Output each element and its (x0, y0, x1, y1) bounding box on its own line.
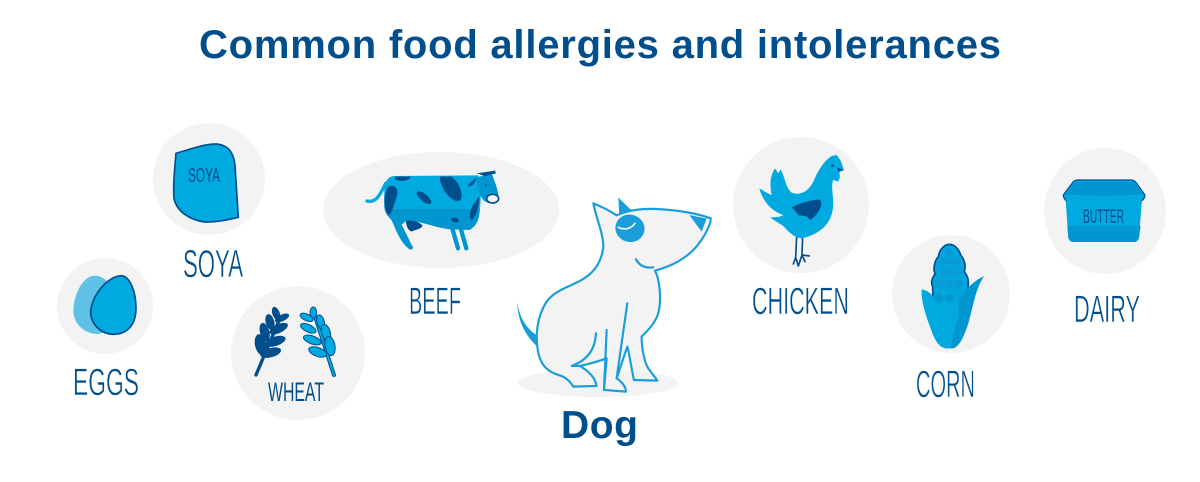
panel: corn (892, 235, 1010, 353)
icon: corn (922, 244, 984, 349)
panel: dairy (1044, 148, 1166, 274)
panel: wheat (231, 286, 365, 420)
label: dairy: DAIRY (1074, 289, 1140, 331)
icon: soya packet (174, 144, 238, 222)
label: corn: CORN (916, 364, 975, 406)
label: dog: Dog (561, 404, 638, 447)
icon: dog (517, 197, 711, 392)
panel: soya (153, 123, 265, 235)
label: chicken: CHICKEN (752, 281, 849, 323)
icon: cow (367, 171, 499, 248)
panel: chicken (733, 137, 869, 273)
label: soya: SOYA (183, 243, 243, 286)
label: eggs: EGGS (73, 362, 139, 404)
icon: eggs (73, 276, 136, 334)
panel: dog (517, 197, 711, 397)
icon: chicken (759, 155, 844, 266)
panel: eggs (57, 258, 153, 354)
tub label: BUTTER (1083, 207, 1124, 228)
title: Common food allergies and intolerances (199, 23, 1001, 67)
label: beef: BEEF (409, 281, 461, 323)
packet label: SOYA (188, 165, 220, 187)
label: wheat: WHEAT (268, 377, 324, 407)
icon: butter tub (1063, 180, 1145, 242)
panel: beef (323, 152, 559, 268)
icon: wheat stalks (253, 306, 337, 375)
